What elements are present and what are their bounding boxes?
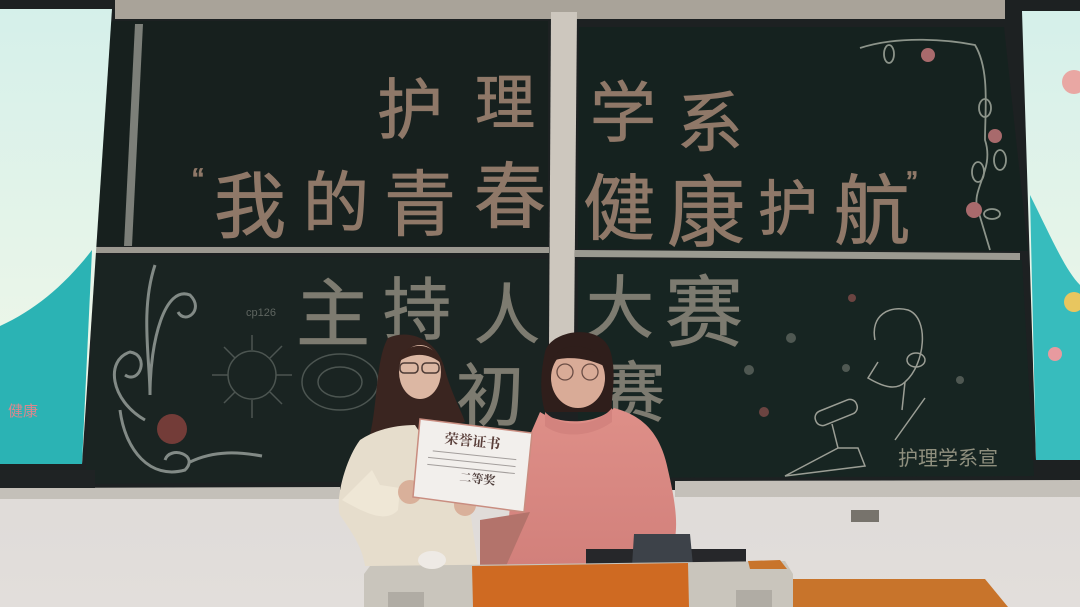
- chalk drawing: vine top right: [860, 40, 1006, 250]
- panel: lower right blackboard: [578, 260, 1034, 478]
- person: right woman in pink sweater: [480, 332, 676, 566]
- chalk flowers: [744, 294, 964, 417]
- title: line 2: ”: [907, 165, 917, 201]
- title: line 3: 初: [456, 359, 524, 435]
- panel: upper right blackboard: [578, 27, 1028, 251]
- right projection screen: [1022, 11, 1080, 460]
- title: line 1: [377, 70, 743, 160]
- title: line 2: 的: [303, 166, 369, 240]
- title: line 3: 大: [586, 271, 654, 347]
- title: line 3: 持: [383, 273, 451, 349]
- title: line 1: 理: [475, 70, 535, 137]
- title: line 1: 护: [377, 73, 443, 147]
- title: line 2: 康: [667, 169, 745, 257]
- chalk drawing: sun: [212, 307, 378, 418]
- title: line 3: 人: [474, 278, 540, 352]
- title: line 3: 主: [296, 273, 370, 356]
- chalk caption bottom right: 护理学系宣: [898, 447, 998, 470]
- person: left woman: [339, 335, 478, 566]
- title: line 2: 春: [474, 158, 546, 238]
- title: line 2: 健: [583, 170, 655, 250]
- chalk drawing: swirl lower left: [114, 265, 262, 472]
- title: line 2: “: [192, 162, 204, 200]
- title: line 3: 赛: [665, 269, 743, 357]
- left projection screen: [0, 9, 112, 464]
- title: line 2: 青: [384, 166, 456, 246]
- certificate held by the left woman: 荣誉证书: [444, 430, 502, 453]
- orange table: [790, 579, 1008, 607]
- title: line 2: [192, 158, 917, 257]
- panel: lower left blackboard: [85, 255, 548, 484]
- title: line 3: 赛: [599, 356, 665, 430]
- left projection screen: 健康: [8, 403, 38, 420]
- title: line 2: 航: [834, 170, 910, 255]
- title: line 3: [296, 269, 743, 435]
- certificate held by the left woman: 二等奖: [459, 469, 496, 488]
- chalk drawing: sun: cp126: [246, 307, 276, 319]
- title: line 2: 我: [214, 168, 286, 248]
- podium with monitor: [364, 534, 793, 607]
- title: line 1: 学: [590, 76, 656, 150]
- title: line 1: 系: [677, 86, 743, 160]
- panel: upper left blackboard: [97, 21, 548, 246]
- chalk drawing: face and microphone: [785, 309, 925, 476]
- socket plate on wall: [851, 510, 879, 522]
- title: line 2: 护: [758, 176, 818, 243]
- certificate held by the left woman: [413, 419, 532, 512]
